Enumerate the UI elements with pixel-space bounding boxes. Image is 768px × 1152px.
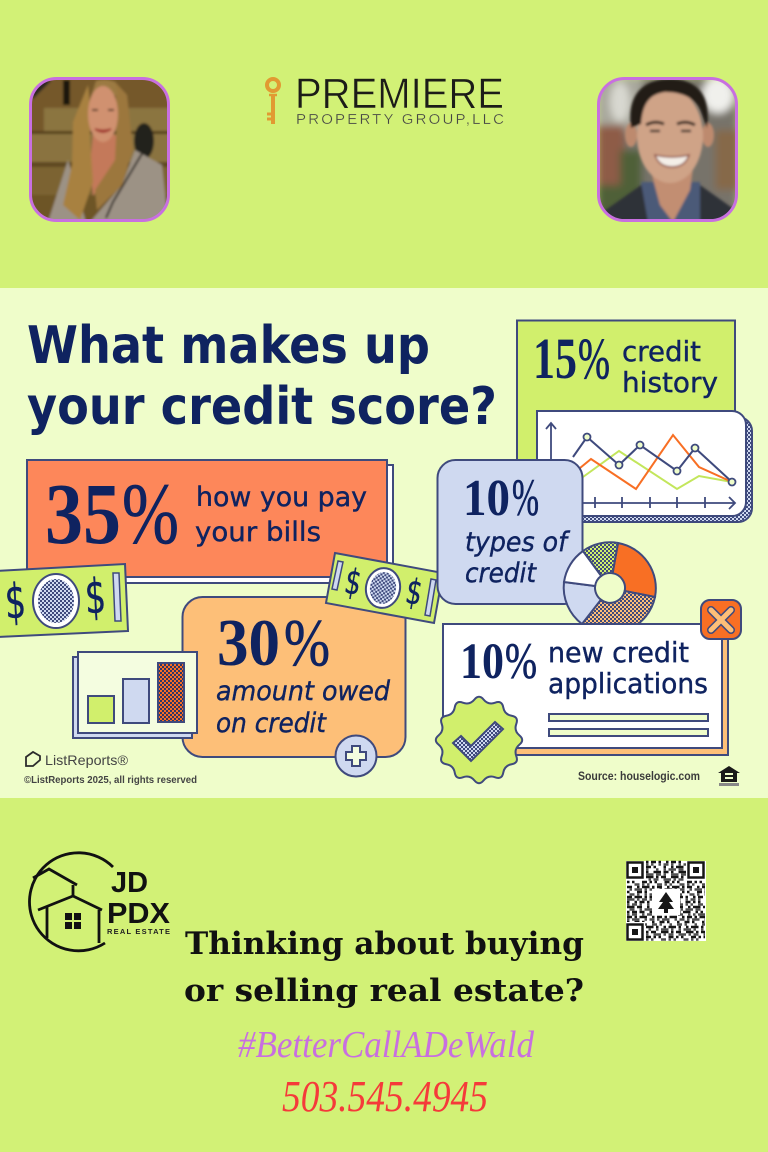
icon: right dollar bill: $	[402, 572, 426, 614]
logo: JD PDX Real Estate: PDX	[107, 898, 171, 930]
QR code	[626, 861, 706, 941]
icon: close button	[701, 600, 741, 639]
copyright line: ©ListReports 2025, all rights reserved	[24, 775, 197, 786]
panel: 30% amount owed on credit: %	[284, 606, 330, 680]
panel: 35% how you pay your bills: %	[122, 465, 179, 562]
logo: Premiere Property Group	[267, 70, 504, 128]
icon: left dollar bill	[0, 564, 128, 637]
logo: Premiere Property Group: PROPERTY GROUP,LLC	[296, 111, 504, 128]
source line: Source: houselogic.com	[578, 771, 700, 783]
panel: 10% types of credit: 10	[463, 470, 510, 527]
panel: 15% credit history: history	[622, 366, 718, 399]
panel: 30% amount owed on credit: on credit	[216, 708, 327, 739]
panel: 30% amount owed on credit: 30	[217, 606, 280, 680]
phone number: 503.545.4945	[282, 1072, 488, 1121]
title	[27, 316, 497, 437]
donut chart	[564, 542, 656, 633]
panel: 10% types of credit: types of	[465, 527, 570, 558]
panel: 10% new credit applications: applications	[548, 667, 708, 700]
icon: left dollar bill: $	[83, 568, 107, 625]
panel: 10% new credit applications: %	[505, 634, 537, 690]
photo: woman agent	[29, 77, 170, 222]
icon: gold key	[267, 79, 279, 124]
icon: right dollar bill	[326, 553, 443, 623]
panel: 35% how you pay your bills: your bills	[195, 517, 321, 548]
title: What makes up	[27, 316, 430, 376]
panel: 10% new credit applications: 10	[460, 634, 504, 690]
logo: Premiere Property Group: PREMIERE	[295, 70, 504, 118]
call to action text: Thinking about buying	[185, 926, 584, 962]
line chart card	[537, 411, 752, 522]
panel: 10% new credit applications: new credit	[548, 636, 689, 669]
panel: 10% types of credit	[438, 460, 582, 604]
icon: house in circle	[29, 853, 113, 951]
icon: plus circle	[336, 736, 376, 776]
panel: 15% credit history: %	[578, 326, 610, 391]
icon: check badge	[436, 697, 522, 783]
logo: JD PDX Real Estate	[29, 853, 171, 951]
ListReports logo: ListReports®	[45, 752, 129, 768]
panel: 15% credit history	[517, 320, 735, 470]
logo: JD PDX Real Estate: JD	[111, 867, 148, 899]
panel: 10% types of credit: credit	[465, 558, 537, 589]
icon: right dollar bill: $	[341, 562, 365, 604]
icon: left dollar bill: $	[3, 573, 27, 630]
logo: JD PDX Real Estate: REAL ESTATE	[107, 927, 170, 936]
panel: 30% amount owed on credit	[182, 597, 406, 757]
panel: 10% new credit applications	[443, 624, 728, 755]
title: your credit score?	[27, 377, 497, 437]
panel: 35% how you pay your bills	[27, 460, 393, 583]
panel: 10% types of credit: %	[512, 470, 539, 527]
bar chart	[73, 652, 197, 738]
icon: equal housing	[718, 766, 740, 786]
photo: man agent	[597, 77, 740, 222]
panel: credit score infographic background	[0, 288, 768, 798]
panel: 30% amount owed on credit: amount owed	[216, 676, 391, 707]
panel: 15% credit history: 15	[533, 326, 577, 391]
hashtag: #BetterCallADeWald	[238, 1024, 535, 1066]
panel: 15% credit history: credit	[622, 335, 701, 368]
panel: 35% how you pay your bills: 35	[45, 465, 121, 562]
call to action text: or selling real estate?	[184, 973, 584, 1009]
panel: 35% how you pay your bills: how you pay	[196, 482, 367, 513]
call to action text	[184, 926, 584, 1009]
